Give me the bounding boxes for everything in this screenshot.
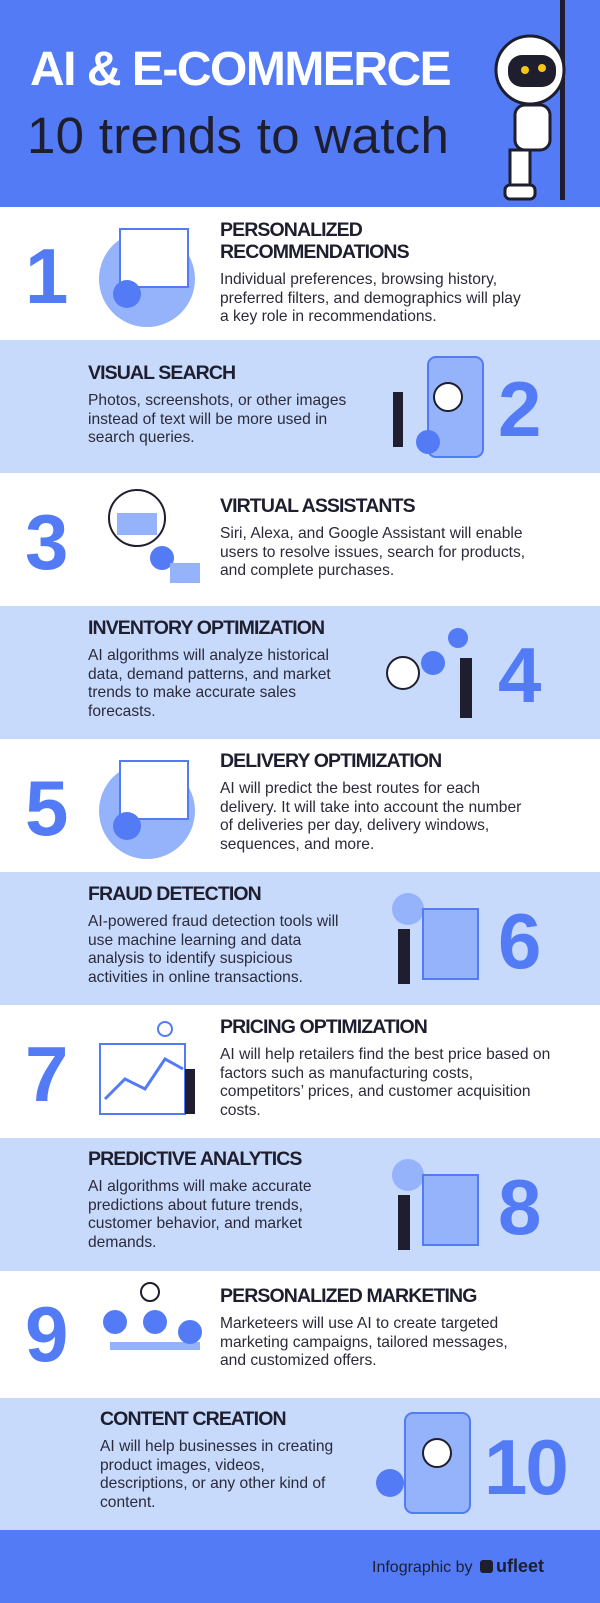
text: predictive analytics: PREDICTIVE ANALYTICS bbox=[88, 1148, 302, 1170]
text: virtual assistants: Siri, Alexa, and Google Assistant will enable bbox=[220, 525, 523, 542]
text: virtual assistants: users to resolve issues, search for products, bbox=[220, 544, 525, 560]
illustration: person at screen bbox=[99, 760, 195, 859]
icon: robot bbox=[494, 0, 566, 200]
number 10: 10 bbox=[484, 1423, 567, 1511]
text: content creation: AI will help businesses in creating bbox=[100, 1438, 333, 1455]
illustration: phone robot bbox=[376, 1412, 471, 1514]
number 6: 6 bbox=[498, 897, 539, 985]
number 4: 4 bbox=[498, 631, 539, 719]
row 6 bbox=[0, 872, 600, 1005]
text: virtual assistants bbox=[220, 495, 525, 579]
text: virtual assistants: VIRTUAL ASSISTANTS bbox=[220, 495, 415, 517]
number 1: 1 bbox=[25, 232, 66, 320]
text: inventory optimization: trends to make accurate sales bbox=[88, 684, 296, 701]
row 9 bbox=[25, 1282, 508, 1378]
row 5 bbox=[25, 750, 522, 859]
text: predictive analytics: demands. bbox=[88, 1234, 156, 1250]
text: delivery optimization bbox=[220, 750, 522, 852]
text: personalized marketing: marketing campaigns, tailored messages, bbox=[220, 1334, 508, 1350]
number 5: 5 bbox=[25, 764, 66, 852]
text: personalized recommendations bbox=[220, 219, 521, 325]
text: virtual assistants: and complete purchases. bbox=[220, 562, 394, 579]
text: pricing optimization: AI will help retailers find the best price based on bbox=[220, 1046, 550, 1063]
text: visual search: search queries. bbox=[88, 429, 195, 446]
row 4 bbox=[0, 606, 600, 739]
illustration: support robot bbox=[108, 489, 200, 583]
text: predictive analytics: customer behavior, and market bbox=[88, 1215, 302, 1232]
row 7 bbox=[25, 1016, 550, 1118]
row 3 bbox=[25, 489, 525, 586]
illustration: binary screen bbox=[392, 1159, 479, 1250]
subtitle: 10 trends to watch bbox=[27, 107, 449, 164]
text: personalized recommendations: preferred filters, and demographics will play bbox=[220, 290, 521, 306]
text: content creation: content. bbox=[100, 1494, 155, 1510]
text: personalized marketing bbox=[220, 1285, 508, 1369]
text: visual search bbox=[88, 362, 346, 446]
text: personalized marketing: PERSONALIZED MARKETING bbox=[220, 1285, 476, 1307]
text: content creation bbox=[100, 1408, 333, 1510]
illustration: team bbox=[103, 1282, 202, 1350]
illustration: person at screen bbox=[99, 228, 195, 327]
text: pricing optimization: PRICING OPTIMIZATION bbox=[220, 1016, 427, 1038]
row 1 bbox=[25, 219, 521, 327]
text: pricing optimization: factors such as manufacturing costs, bbox=[220, 1064, 473, 1082]
text: personalized marketing: and customized offers. bbox=[220, 1352, 377, 1369]
text: fraud detection: FRAUD DETECTION bbox=[88, 883, 261, 905]
illustration: phone robot bbox=[393, 356, 484, 458]
text: delivery optimization: DELIVERY OPTIMIZATION bbox=[220, 750, 441, 772]
header bbox=[0, 0, 600, 207]
text: pricing optimization bbox=[220, 1016, 550, 1118]
number 3: 3 bbox=[25, 498, 66, 586]
text: personalized recommendations: a key role in recommendations. bbox=[220, 308, 437, 325]
row 10 bbox=[0, 1398, 600, 1531]
text: inventory optimization bbox=[88, 617, 331, 720]
text: fraud detection bbox=[88, 883, 338, 986]
text: personalized marketing: Marketeers will use AI to create targeted bbox=[220, 1315, 498, 1332]
footer bbox=[0, 1530, 600, 1603]
text: predictive analytics: AI algorithms will make accurate bbox=[88, 1178, 312, 1195]
text: inventory optimization: forecasts. bbox=[88, 702, 156, 720]
text: visual search: Photos, screenshots, or other images bbox=[88, 392, 346, 409]
text: delivery optimization: of deliveries per day, delivery windows, bbox=[220, 817, 489, 834]
text: visual search: VISUAL SEARCH bbox=[88, 362, 235, 384]
text: delivery optimization: delivery. It will take into account the number bbox=[220, 798, 521, 816]
number 9: 9 bbox=[25, 1290, 66, 1378]
text: delivery optimization: sequences, and more. bbox=[220, 836, 374, 852]
text: content creation: CONTENT CREATION bbox=[100, 1408, 286, 1430]
text: fraud detection: AI-powered fraud detection tools will bbox=[88, 913, 338, 930]
text: inventory optimization: INVENTORY OPTIMIZATION bbox=[88, 617, 324, 639]
text: predictive analytics: predictions about future trends, bbox=[88, 1196, 303, 1214]
illustration: gears bbox=[386, 628, 472, 718]
text: fraud detection: activities in online transactions. bbox=[88, 968, 303, 986]
text: delivery optimization: AI will predict the best routes for each bbox=[220, 780, 480, 797]
text: content creation: product images, videos, bbox=[100, 1456, 265, 1474]
number 2: 2 bbox=[498, 365, 539, 453]
text: personalized recommendations: RECOMMENDATIONS bbox=[220, 241, 409, 263]
illustration: binary screen bbox=[392, 893, 479, 984]
row 2 bbox=[0, 340, 600, 473]
text: inventory optimization: data, demand patterns, and market bbox=[88, 666, 331, 682]
row 8 bbox=[0, 1138, 600, 1271]
text: personalized recommendations: Individual preferences, browsing history, bbox=[220, 271, 497, 288]
text: content creation: descriptions, or any other kind of bbox=[100, 1475, 325, 1492]
text: inventory optimization: AI algorithms will analyze historical bbox=[88, 647, 329, 664]
illustration: charts bbox=[99, 1021, 195, 1115]
text: personalized recommendations: PERSONALIZED bbox=[220, 219, 362, 241]
text: fraud detection: use machine learning and data bbox=[88, 932, 301, 948]
number 8: 8 bbox=[498, 1163, 539, 1251]
text: pricing optimization: competitors’ prices, and customer acquisition bbox=[220, 1083, 531, 1100]
text: fraud detection: analysis to identify suspicious bbox=[88, 950, 293, 967]
footer credit: Infographic by ufleet bbox=[372, 1556, 544, 1576]
text: visual search: instead of text will be more used in bbox=[88, 410, 327, 428]
text: pricing optimization: costs. bbox=[220, 1102, 261, 1118]
title: AI & E-COMMERCE bbox=[30, 43, 450, 96]
number 7: 7 bbox=[25, 1030, 66, 1118]
text: predictive analytics bbox=[88, 1148, 312, 1250]
